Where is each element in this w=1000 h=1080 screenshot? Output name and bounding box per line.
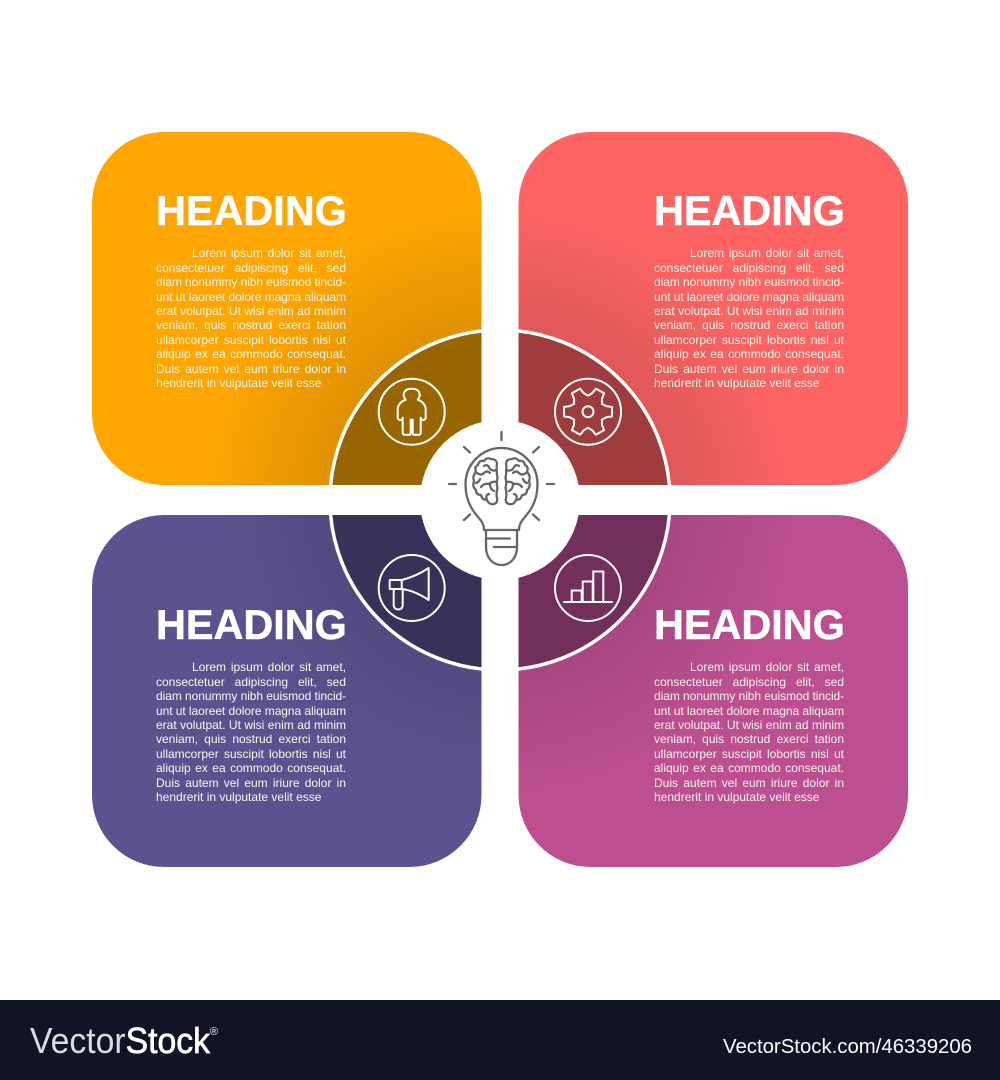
- text block: ullamcorper suscipit lobortis nisl ut: [156, 747, 346, 761]
- heading: HEADING: [654, 602, 845, 648]
- center circle with lightbulb brain icon: [421, 422, 579, 578]
- text block: Duis autem vel eum iriure dolor in: [654, 776, 844, 790]
- text block: [156, 246, 346, 390]
- text block: [654, 660, 844, 804]
- text block: veniam, quis nostrud exerci tation: [156, 732, 346, 746]
- text block: consectetuer adipiscing elit, sed: [156, 261, 346, 275]
- icon: bar chart: [555, 555, 621, 621]
- quadrant: top-left: [328, 329, 482, 485]
- text block: unt ut laoreet dolore magna aliquam: [654, 704, 844, 718]
- text block: diam nonummy nibh euismod tincid-: [156, 689, 346, 703]
- registered mark: ®: [210, 1026, 218, 1038]
- heading: HEADING: [156, 602, 347, 648]
- text block: Lorem ipsum dolor sit amet,: [690, 660, 844, 674]
- heading: HEADING: [654, 188, 845, 234]
- text block: erat volutpat. Ut wisi enim ad minim: [156, 304, 346, 318]
- text block: ullamcorper suscipit lobortis nisl ut: [654, 747, 844, 761]
- text block: hendrerit in vulputate velit esse: [654, 790, 819, 804]
- logo text: VectorStock: [30, 1020, 211, 1061]
- text block: Lorem ipsum dolor sit amet,: [192, 660, 346, 674]
- panel: bottom-right magenta: [518, 515, 908, 867]
- text block: Duis autem vel eum iriure dolor in: [654, 362, 844, 376]
- text block: unt ut laoreet dolore magna aliquam: [156, 704, 346, 718]
- text block: Duis autem vel eum iriure dolor in: [156, 776, 346, 790]
- text block: unt ut laoreet dolore magna aliquam: [156, 290, 346, 304]
- text block: diam nonummy nibh euismod tincid-: [654, 275, 844, 289]
- text block: aliquip ex ea commodo consequat.: [156, 761, 346, 775]
- heading: HEADING: [156, 188, 347, 234]
- text block: [654, 246, 844, 390]
- footer watermark bar: [0, 1000, 1000, 1080]
- quadrant: bottom-left: [328, 515, 482, 671]
- icon: person: [379, 379, 445, 445]
- text block: aliquip ex ea commodo consequat.: [654, 347, 844, 361]
- text block: veniam, quis nostrud exerci tation: [654, 318, 844, 332]
- text block: erat volutpat. Ut wisi enim ad minim: [654, 718, 844, 732]
- text block: veniam, quis nostrud exerci tation: [654, 732, 844, 746]
- text block: diam nonummy nibh euismod tincid-: [156, 275, 346, 289]
- text block: diam nonummy nibh euismod tincid-: [654, 689, 844, 703]
- text block: consectetuer adipiscing elit, sed: [156, 675, 346, 689]
- text block: unt ut laoreet dolore magna aliquam: [654, 290, 844, 304]
- text block: consectetuer adipiscing elit, sed: [654, 261, 844, 275]
- quadrant: bottom-right: [518, 515, 672, 671]
- text block: hendrerit in vulputate velit esse: [156, 790, 321, 804]
- text block: Duis autem vel eum iriure dolor in: [156, 362, 346, 376]
- text block: [156, 660, 346, 804]
- text block: veniam, quis nostrud exerci tation: [156, 318, 346, 332]
- text block: ullamcorper suscipit lobortis nisl ut: [156, 333, 346, 347]
- panel: top-right coral: [518, 132, 908, 485]
- text block: erat volutpat. Ut wisi enim ad minim: [654, 304, 844, 318]
- icon: gear: [555, 379, 621, 445]
- text block: Lorem ipsum dolor sit amet,: [690, 246, 844, 260]
- quadrant: top-right: [518, 329, 672, 485]
- text block: aliquip ex ea commodo consequat.: [654, 761, 844, 775]
- text block: ullamcorper suscipit lobortis nisl ut: [654, 333, 844, 347]
- text block: erat volutpat. Ut wisi enim ad minim: [156, 718, 346, 732]
- panel: top-left orange: [92, 132, 482, 485]
- text block: aliquip ex ea commodo consequat.: [156, 347, 346, 361]
- url text: VectorStock.com/46339206: [723, 1036, 972, 1058]
- text block: Lorem ipsum dolor sit amet,: [192, 246, 346, 260]
- text block: consectetuer adipiscing elit, sed: [654, 675, 844, 689]
- panel: bottom-left indigo: [92, 515, 482, 867]
- icon: lightbulb with brain: [449, 432, 554, 565]
- icon: megaphone: [379, 555, 445, 621]
- text block: hendrerit in vulputate velit esse: [156, 376, 321, 390]
- text block: hendrerit in vulputate velit esse: [654, 376, 819, 390]
